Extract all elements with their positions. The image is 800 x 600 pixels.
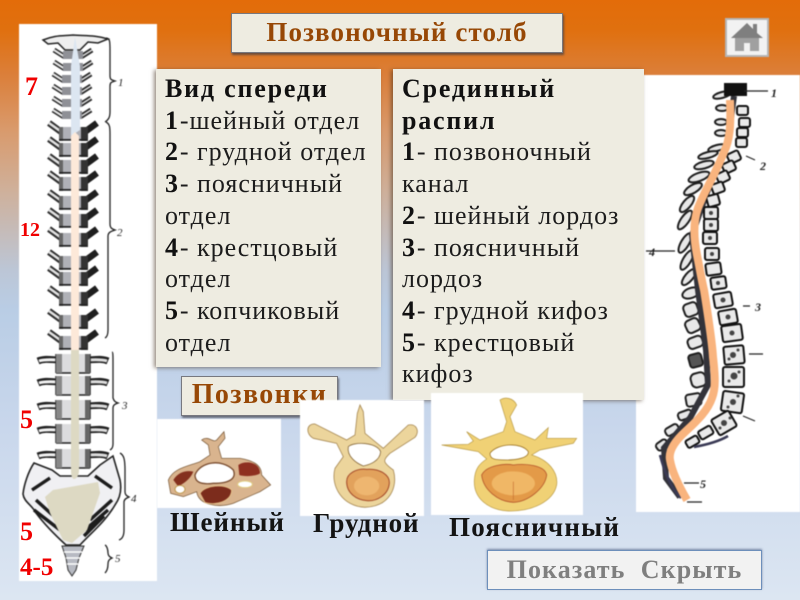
icon: sacrum base [660, 436, 728, 498]
labels on image: 1 [118, 77, 124, 89]
panel: median section legend: распил [402, 106, 496, 135]
icon: sacrum wings [23, 456, 121, 545]
title: Позвоночный столб [266, 17, 528, 47]
text block: thoracic caption: Грудной [313, 508, 420, 538]
panel: median section spine image [636, 74, 800, 512]
icon: cervical vertebra [157, 418, 282, 508]
panel: median section legend: кифоз [402, 359, 474, 388]
labels on image: 4 [131, 493, 137, 505]
panel: front view legend: отдел [165, 328, 231, 357]
panel: front view legend: 4- крестцовый [165, 233, 338, 262]
callout: lumbar count: 5 [20, 405, 33, 434]
icon: home button [724, 17, 770, 58]
panel: front view legend: 3- поясничный [165, 169, 343, 198]
panel: median section spine image: 3 [754, 300, 761, 314]
icon: vertebral texture [708, 211, 740, 430]
icon: thoracic vertebra [299, 399, 424, 516]
callout: cervical count: 7 [25, 72, 38, 101]
heading: vertebrae button: Позвонки [192, 379, 327, 410]
icon: spinal highlight stripes [45, 37, 100, 543]
panel: front view spine image [18, 23, 158, 582]
callout: coccygeal count: 4-5 [20, 554, 53, 581]
text block: lumbar caption: Поясничный [449, 512, 620, 542]
labels on image: 5 [115, 553, 121, 565]
callout: thoracic count: 12 [20, 219, 40, 241]
labels on image [115, 77, 137, 565]
text block: cervical caption: Шейный [170, 507, 285, 537]
icon: region braces [105, 38, 129, 573]
title [231, 13, 563, 53]
panel: front view legend: 1-шейный отдел [165, 106, 360, 135]
icon: spinal canal line [670, 100, 730, 500]
panel: median section spine image: 4 [648, 245, 655, 259]
icon: lumbar vertebra [430, 392, 584, 516]
icon: spinous processes [655, 90, 731, 452]
icon: coccyx [62, 546, 84, 576]
panel: front view legend: отдел [165, 201, 231, 230]
panel: median section legend [393, 69, 644, 400]
panel: median section legend: Срединный [402, 74, 556, 103]
icon: dark cord shadow [664, 96, 734, 497]
panel: front view legend: отдел [165, 264, 231, 293]
panel: median section spine image: 1 [771, 86, 777, 100]
heading: show/hide button [487, 550, 762, 590]
panel: median section legend: 5- крестцовый [402, 328, 575, 357]
panel: median section legend: канал [402, 169, 469, 198]
panel: median section legend: лордоз [402, 264, 483, 293]
icon: vertebral bodies [685, 84, 750, 448]
panel: median section spine image: 2 [759, 159, 766, 173]
panel: median section legend: 3- поясничный [402, 233, 580, 262]
callout: sacral count: 5 [20, 517, 33, 546]
heading: show/hide button: Показать Скрыть [507, 555, 742, 584]
labels and arrows on image [646, 91, 768, 502]
labels on image: 3 [121, 400, 128, 412]
panel: median section legend: 4- грудной кифоз [402, 296, 609, 325]
panel: front view legend: Вид спереди [165, 74, 329, 103]
panel: median section spine image: 5 [700, 477, 706, 491]
labels on image: 2 [117, 227, 123, 239]
panel: median section legend: 1- позвоночный [402, 137, 592, 166]
panel: median section legend: 2- шейный лордоз [402, 201, 619, 230]
panel: front view legend: 2- грудной отдел [165, 137, 367, 166]
panel: front view legend: 5- копчиковый [165, 296, 340, 325]
heading: vertebrae button [181, 376, 338, 416]
icon: atlas [43, 35, 108, 50]
panel: front view legend [156, 69, 381, 367]
